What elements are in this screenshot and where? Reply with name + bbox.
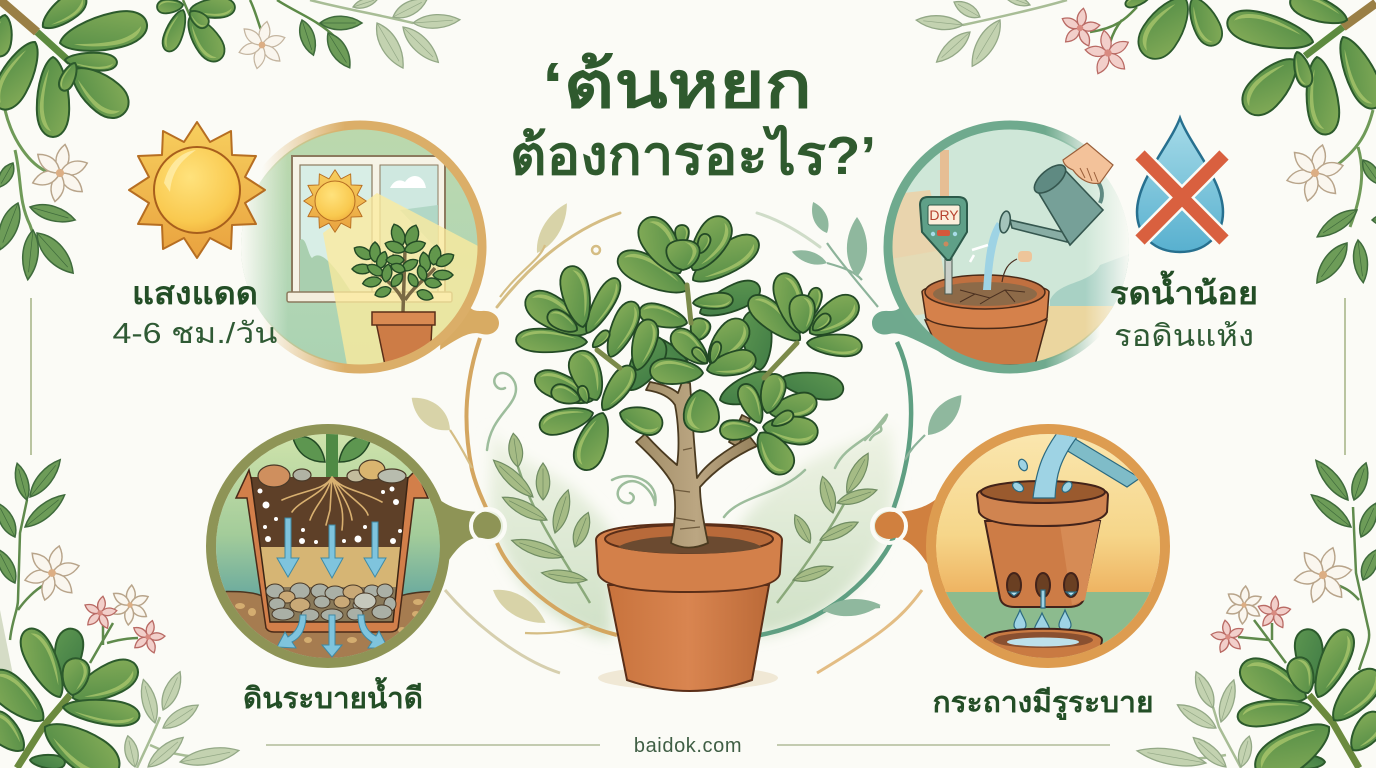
footer: source: baidok.com — [634, 735, 742, 757]
back leaves — [617, 275, 845, 413]
soil meter — [920, 197, 967, 294]
pebbles — [266, 583, 396, 621]
watering can — [998, 160, 1103, 245]
foliage: top left corner — [0, 0, 151, 281]
crack pointer — [1002, 259, 1017, 282]
panel: pot with drainage holes — [872, 429, 1170, 670]
leaf clusters — [516, 210, 865, 480]
saucer — [984, 628, 1103, 658]
label: watering — [1110, 270, 1258, 353]
panel: sunlight — [230, 120, 499, 380]
label: sunlight: 4-6 ชม./วัน — [112, 318, 278, 350]
roots — [282, 477, 382, 530]
central jade plant — [516, 210, 865, 691]
label: sunlight — [112, 276, 278, 350]
top stones — [258, 460, 406, 487]
pot — [977, 481, 1108, 607]
label: watering: รอดินแห้ง — [1114, 320, 1254, 353]
label: sunlight: แสงแดด — [132, 276, 258, 311]
visible stems — [597, 285, 797, 378]
soil meter: DRY — [929, 207, 959, 223]
window — [287, 156, 452, 302]
label: watering: รดน้ำน้อย — [1110, 270, 1258, 311]
label: well-draining soil: ดินระบายน้ำดี — [243, 676, 423, 715]
water stream — [983, 222, 1000, 290]
side rule right — [1344, 298, 1346, 455]
clay pot with dry soil — [922, 275, 1049, 365]
side rule left — [30, 298, 32, 455]
foliage: bottom right corner — [1136, 456, 1376, 768]
title: ต้องการอะไร?’ — [510, 124, 876, 186]
hand — [1063, 143, 1113, 183]
foliage: top centre right sprigs — [916, 0, 1227, 78]
ground pebbles — [235, 599, 423, 643]
drips — [1009, 458, 1076, 639]
foliage: top right corner — [1224, 0, 1376, 288]
central decorative wreath — [405, 199, 969, 673]
small plant in pot — [352, 222, 456, 365]
panel: soil drainage — [210, 429, 505, 670]
panel: watering — [872, 120, 1145, 380]
terracotta pot — [596, 524, 782, 691]
jug spout — [1058, 432, 1140, 487]
trunk and branches — [636, 382, 757, 548]
icon: sun — [129, 122, 265, 258]
title: ‘ต้นหยก — [542, 49, 812, 121]
icon: crossed water drop — [1137, 118, 1224, 252]
water stream — [1033, 433, 1077, 498]
foliage: bottom left corner — [0, 455, 240, 768]
title — [510, 49, 876, 186]
label: pot with drainage holes: กระถางมีรูระบาย — [932, 687, 1154, 720]
foliage: top centre left sprigs — [157, 0, 460, 73]
soil dots — [258, 486, 402, 544]
drainage arrows — [277, 518, 388, 657]
plant stem and leaves — [293, 430, 371, 477]
